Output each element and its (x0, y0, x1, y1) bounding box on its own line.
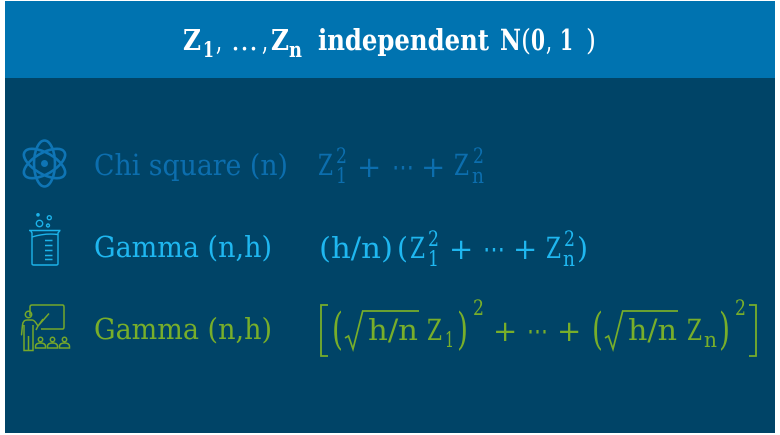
formula: chi square: Z (454, 148, 469, 182)
panel: header band (5, 1, 775, 78)
title: n (289, 37, 302, 62)
label: chi square: Chi square (n) (94, 148, 288, 182)
formula: chi square: n (472, 164, 484, 188)
title: 1 (560, 23, 573, 57)
formula: gamma blue: 2 (428, 227, 439, 251)
label: gamma green: Gamma (n,h) (94, 312, 272, 346)
formula: gamma green: + (493, 314, 517, 348)
formula: gamma blue: + (449, 232, 473, 266)
formula: chi square: + (357, 150, 381, 184)
formula: gamma green: Z (427, 313, 442, 347)
title: , (546, 23, 552, 57)
formula: gamma green: ) (719, 304, 730, 355)
formula: gamma blue: ) (577, 231, 588, 265)
formula: gamma blue: + (513, 232, 537, 266)
formula: gamma green (321, 296, 756, 356)
formula: gamma blue: (h/n) (319, 231, 393, 265)
formula: chi square: 2 (336, 144, 347, 168)
title: , (216, 23, 222, 57)
title (183, 23, 596, 62)
formula: chi square (318, 144, 484, 188)
formula: gamma blue: Z (546, 231, 561, 265)
label: gamma blue: Gamma (n,h) (94, 230, 272, 264)
formula: chi square: 2 (473, 144, 484, 168)
title: independent (318, 23, 489, 57)
formula: gamma green: ⋯ (527, 314, 548, 348)
formula: chi square: ⋯ (392, 150, 414, 184)
icon: beaker with bubbles (29, 213, 60, 265)
formula: chi square: + (421, 150, 445, 184)
formula: gamma green: ( (592, 304, 603, 355)
title: … (231, 23, 258, 57)
title: Z (183, 23, 201, 57)
formula: gamma blue: 1 (428, 247, 439, 271)
formula: gamma blue: ⋯ (483, 232, 505, 266)
formula: gamma blue: Z (410, 231, 425, 265)
formula: gamma green: 1 (445, 328, 454, 352)
formula: gamma green: Z (687, 313, 702, 347)
formula: gamma green: h/n (368, 313, 418, 347)
formula: gamma green: n (704, 328, 717, 352)
formula: gamma green: 2 (473, 296, 484, 320)
formula: gamma green: h/n (628, 313, 677, 347)
formula: gamma green: ) (457, 304, 468, 355)
formula: chi square: 1 (336, 164, 347, 188)
title: 0 (531, 23, 545, 57)
formula: gamma blue: 2 (564, 227, 575, 251)
title: , (262, 23, 268, 57)
formula: gamma green: + (557, 314, 581, 348)
title: 1 (203, 37, 214, 62)
formula: gamma blue: ( (397, 231, 408, 265)
formula: gamma blue (319, 227, 588, 271)
title: N (500, 23, 521, 57)
title: Z (271, 23, 289, 57)
icon: atom (19, 140, 70, 186)
title: ( (521, 23, 531, 57)
formula: gamma green: 2 (735, 296, 746, 320)
formula: gamma blue: n (563, 247, 575, 271)
title: ) (586, 23, 596, 57)
formula: chi square: Z (318, 148, 333, 182)
icon: teacher at board (21, 305, 70, 350)
formula: gamma green: ( (332, 304, 343, 355)
